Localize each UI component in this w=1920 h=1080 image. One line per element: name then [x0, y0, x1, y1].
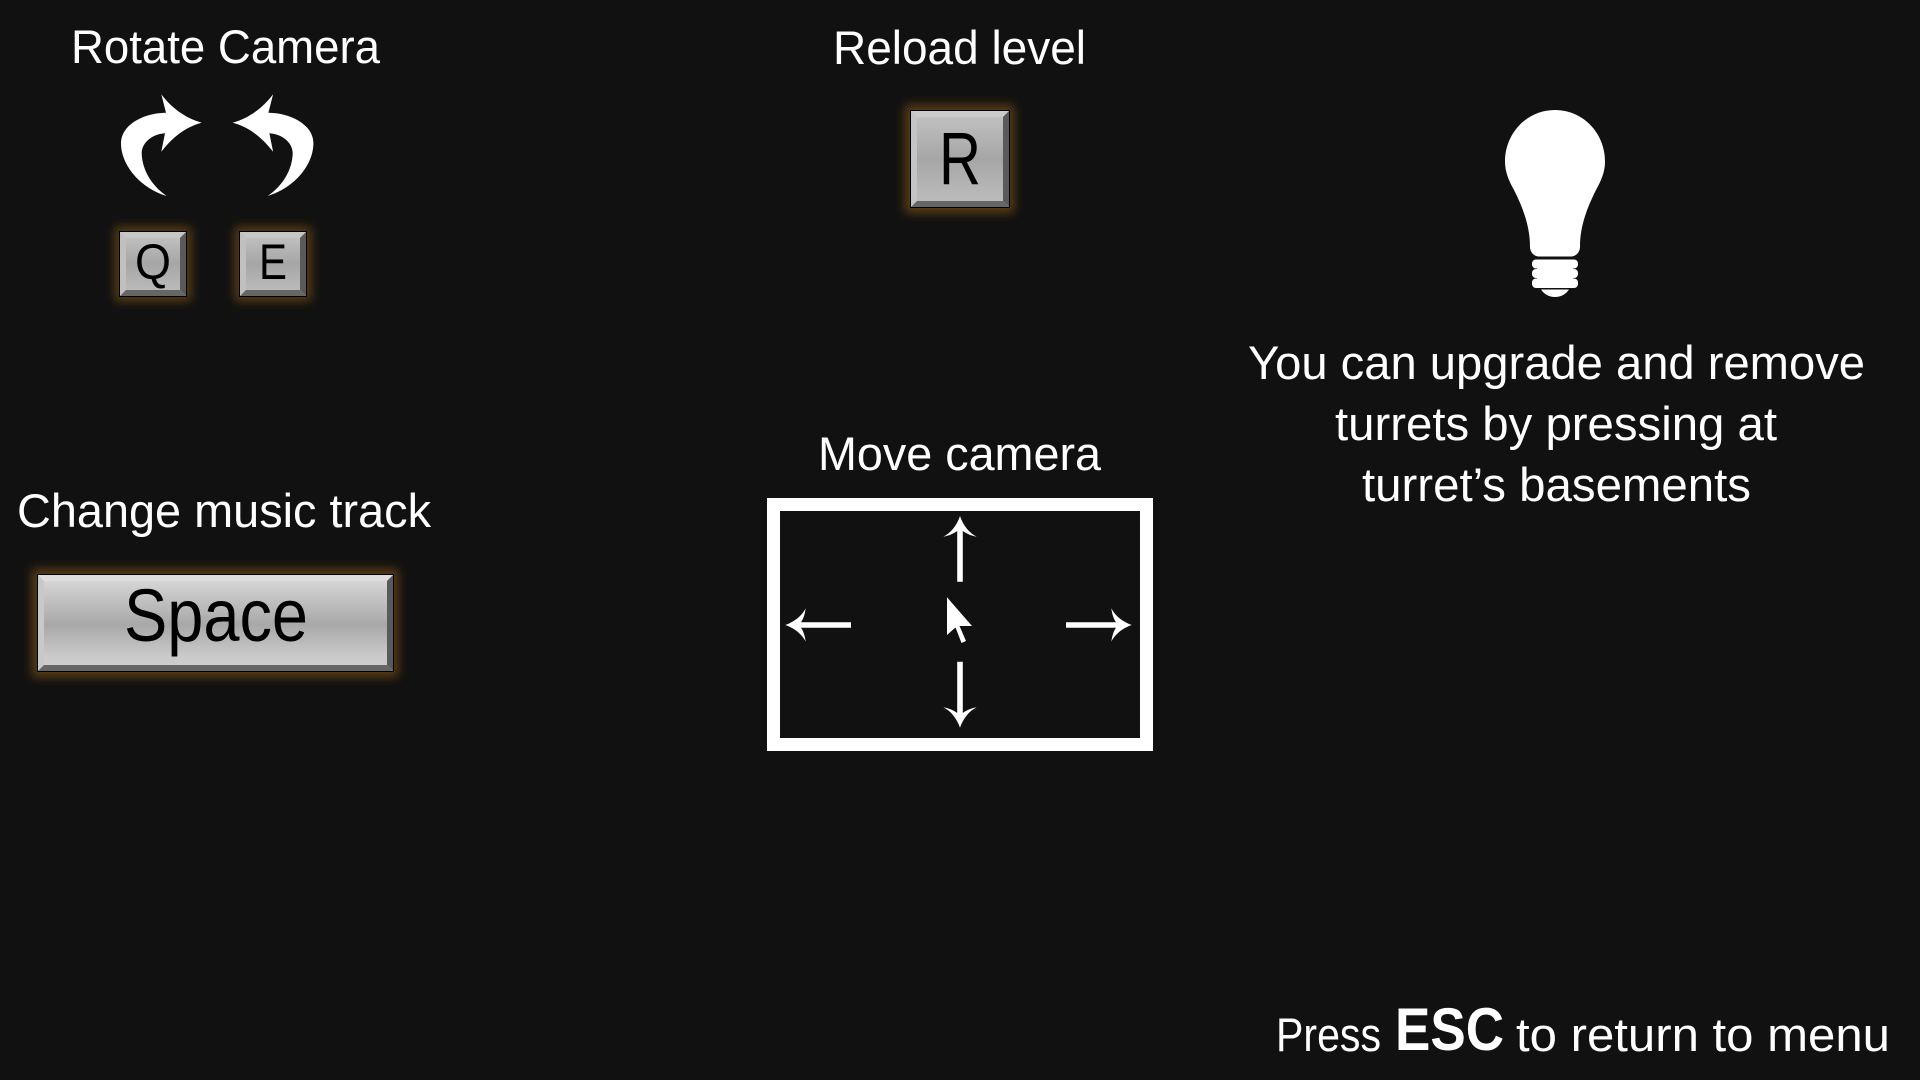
key: R [905, 105, 1014, 213]
arrow: down [943, 662, 977, 728]
key: R: R [939, 117, 981, 200]
tip text: You can upgrade and remove [1248, 336, 1865, 389]
key: Space: Space [124, 574, 308, 657]
key: Space [32, 569, 398, 677]
key: Q: Q [135, 234, 171, 290]
panel: move camera screen frame [774, 504, 1146, 744]
heading: Change music track: Change music track [17, 484, 431, 537]
heading: Reload level: Reload level [833, 21, 1086, 74]
icon: mouse cursor [947, 597, 972, 643]
icon: rotate clockwise arrow [121, 94, 202, 196]
arrow: up [943, 516, 977, 582]
heading: Rotate Camera: Rotate Camera [71, 20, 381, 73]
footer: return to menu: Press [1276, 1008, 1381, 1061]
key: Q [115, 227, 191, 301]
tip text: turrets by pressing at [1335, 397, 1777, 450]
icon: light bulb [1505, 110, 1605, 297]
arrow: left [785, 608, 851, 642]
key: E [235, 227, 311, 301]
footer: return to menu [1276, 996, 1890, 1063]
key: E: E [259, 234, 287, 290]
footer: return to menu: to return to menu [1516, 1008, 1890, 1061]
arrow: right [1066, 608, 1132, 642]
icon: rotate counter-clockwise arrow [233, 94, 313, 196]
footer: return to menu: ESC [1395, 996, 1504, 1063]
tip text: turret’s basements [1362, 458, 1751, 511]
tip text [1248, 336, 1865, 511]
heading: Move camera: Move camera [818, 427, 1102, 480]
